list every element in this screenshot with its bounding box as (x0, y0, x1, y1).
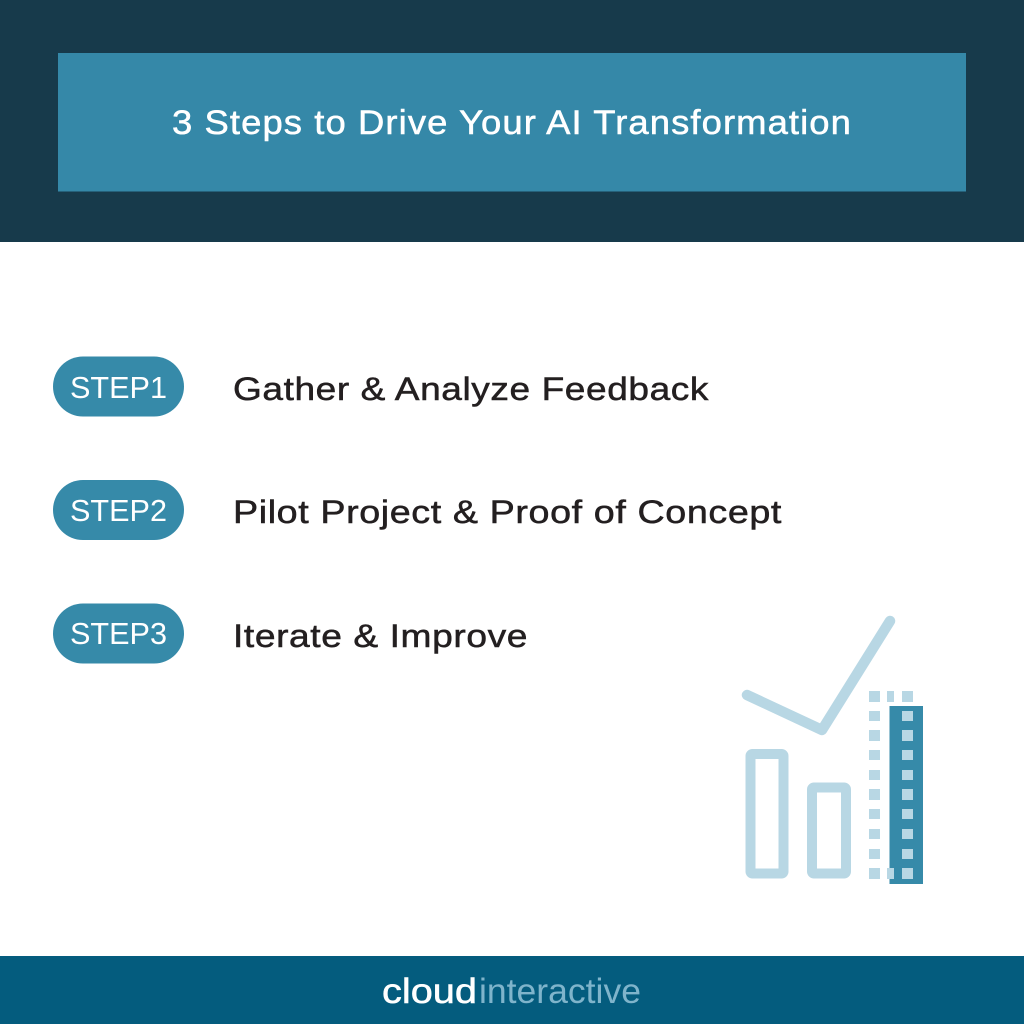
step 1 badge: STEP1 (70, 370, 167, 405)
step 3 badge (53, 604, 184, 664)
footer logo: cloud (382, 972, 477, 1011)
outlined bar 2 (812, 788, 846, 874)
footer logo: interactive (479, 972, 641, 1011)
step 2 label: Pilot Project & Proof of Concept (233, 494, 782, 530)
step 1 badge (53, 356, 184, 416)
step 3 badge: STEP3 (70, 616, 167, 651)
header band (0, 0, 1024, 242)
step 3 row (53, 604, 528, 664)
step 2 badge: STEP2 (70, 493, 167, 528)
footer logo (382, 972, 641, 1011)
icon: bar chart with check line (747, 621, 923, 884)
dotted outline bar (869, 691, 913, 879)
trend check line (747, 621, 890, 730)
outlined bar 1 (750, 754, 784, 874)
step 2 badge (53, 480, 184, 540)
footer band (0, 956, 1024, 1024)
step 3 label: Iterate & Improve (233, 618, 528, 654)
title box (58, 53, 966, 192)
step 1 label: Gather & Analyze Feedback (233, 371, 710, 407)
step 2 row (53, 480, 782, 540)
step 1 row (53, 356, 710, 416)
title: 3 Steps to Drive Your AI Transformation (172, 104, 852, 142)
solid highlighted bar (890, 706, 923, 884)
